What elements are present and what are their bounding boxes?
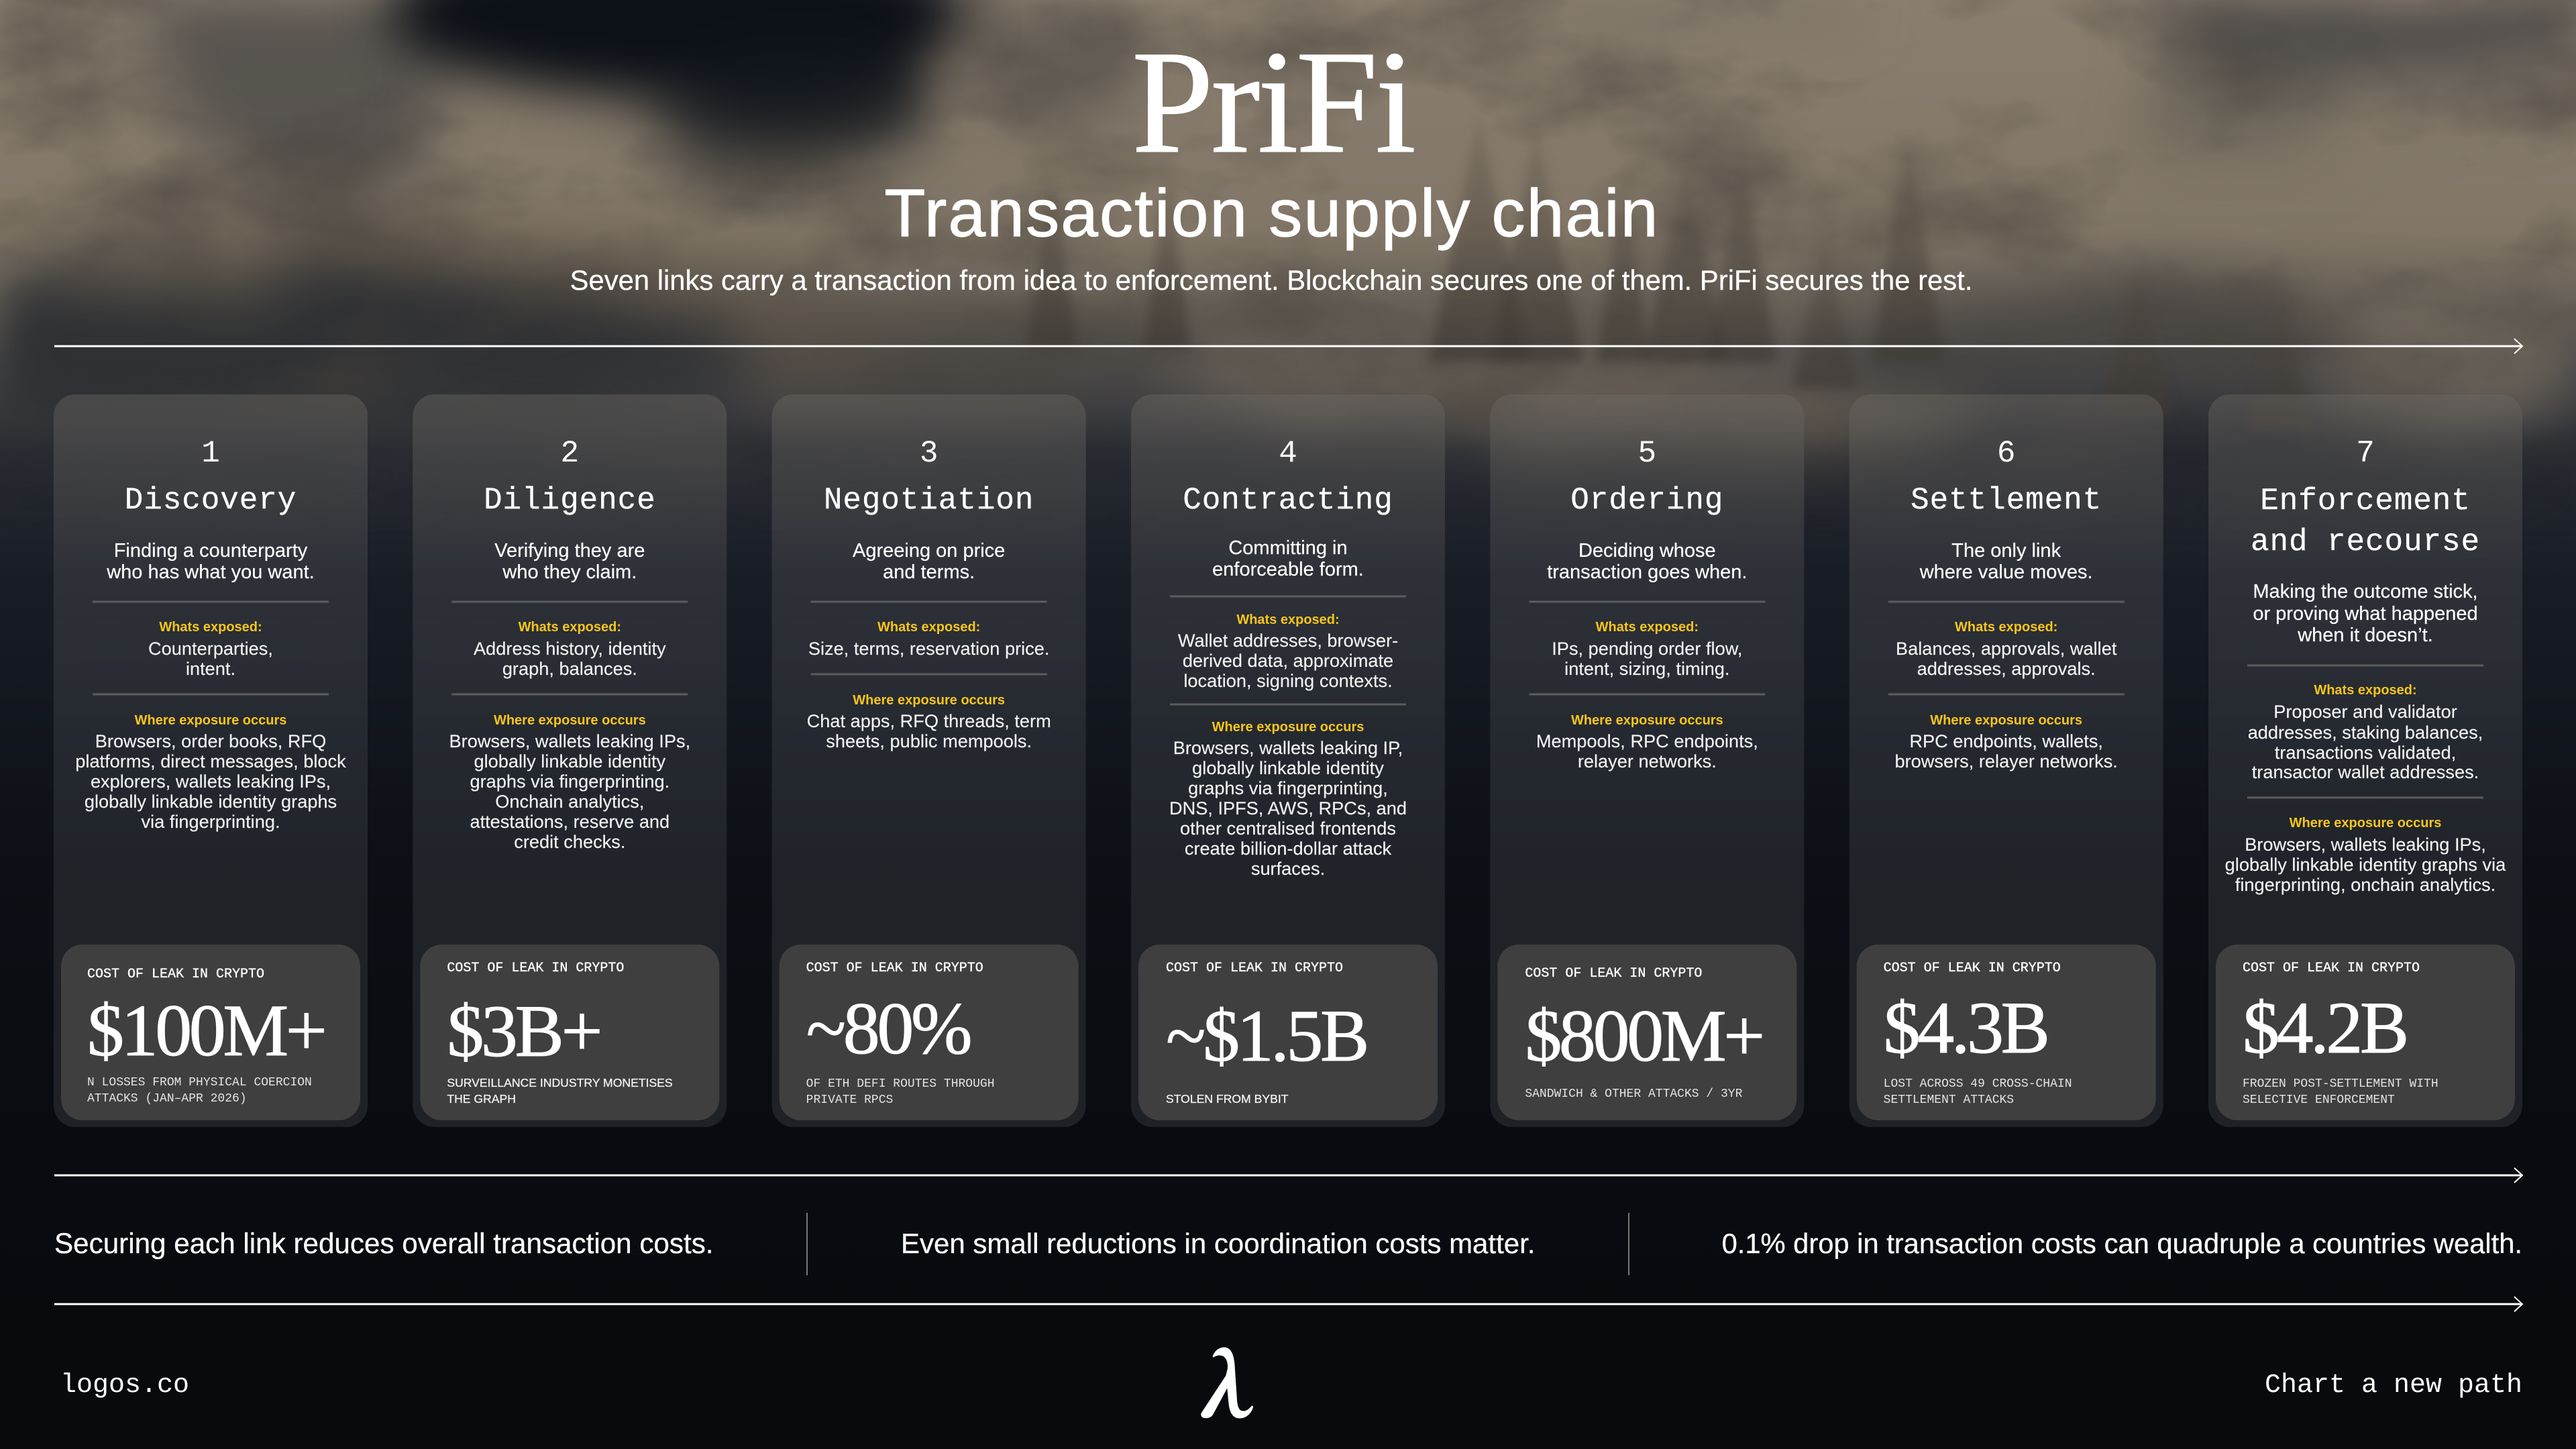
statement 3: 0.1% drop in transaction costs can quadruple a countries wealth.: [1722, 1228, 2522, 1259]
panel: 7 Enforcement and recourse: Where exposure occurs: [2290, 816, 2441, 830]
stat box: ~$1.5B: COST OF LEAK IN CRYPTO: [1166, 961, 1343, 976]
panel: 6 Settlement: 6: [1997, 436, 2015, 471]
panel: 1 Discovery: Browsers, order books, RFQ: [95, 731, 326, 751]
panel: 3 Negotiation: Size, terms, reservation price.: [808, 638, 1049, 659]
panel: 5 Ordering: Where exposure occurs: [1571, 713, 1723, 728]
panel: 7 Enforcement and recourse: 7: [2356, 436, 2375, 471]
panel: 5 Ordering: relayer networks.: [1578, 751, 1717, 771]
stat box: $100M+: ATTACKS (JAN–APR 2026): [87, 1092, 247, 1106]
panel: 7 Enforcement and recourse: Proposer and validator: [2273, 701, 2457, 722]
panel: 1 Discovery: explorers, wallets leaking IPs,: [91, 771, 331, 792]
panel: 2 Diligence: Where exposure occurs: [494, 713, 646, 728]
panel: 4 Contracting: Contracting: [1183, 483, 1393, 518]
panel: 1 Discovery: intent.: [186, 658, 235, 679]
title: PriFi: [1132, 20, 1413, 184]
panel: 7 Enforcement and recourse: fingerprinting, onchain analytics.: [2235, 874, 2496, 895]
arrow: above footer: [54, 1297, 2522, 1311]
panel: 3 Negotiation: and terms.: [883, 561, 975, 583]
panel: 1 Discovery: Counterparties,: [148, 638, 273, 659]
panel: 2 Diligence: Verifying they are: [494, 540, 645, 561]
panel: 2 Diligence: credit checks.: [514, 831, 625, 852]
panel: 5 Ordering: Whats exposed:: [1596, 620, 1699, 635]
panel: 7 Enforcement and recourse: and recourse: [2251, 525, 2480, 559]
arrow: above statements: [54, 1168, 2522, 1183]
panel: 3 Negotiation: Whats exposed:: [877, 620, 980, 635]
stat box: $3B+: SURVEILLANCE INDUSTRY MONETISES: [447, 1076, 673, 1089]
panel: 6 Settlement: The only link: [1951, 540, 2061, 561]
panel: 2 Diligence: [413, 394, 727, 1127]
stat box: ~80%: OF ETH DEFI ROUTES THROUGH: [806, 1077, 995, 1091]
panel: 7 Enforcement and recourse: globally linkable identity graphs via: [2225, 854, 2506, 875]
panel: 1 Discovery: via fingerprinting.: [141, 811, 280, 832]
stat box: $4.3B: [1857, 945, 2156, 1120]
panel: 2 Diligence: Address history, identity: [474, 638, 666, 659]
panel: 2 Diligence: attestations, reserve and: [470, 811, 669, 832]
panel: 6 Settlement: browsers, relayer networks.: [1894, 751, 2118, 771]
panel: 7 Enforcement and recourse: when it doesn’t.: [2297, 625, 2433, 646]
arrow: top chain: [54, 339, 2522, 354]
panel: 6 Settlement: RPC endpoints, wallets,: [1909, 731, 2103, 751]
panel: 1 Discovery: 1: [201, 436, 220, 471]
panel: 4 Contracting: Whats exposed:: [1236, 612, 1340, 627]
panel: 4 Contracting: Committing in: [1228, 537, 1348, 559]
panel: 4 Contracting: globally linkable identity: [1192, 757, 1384, 778]
subtitle heading: Transaction supply chain: [884, 176, 1660, 251]
panel: 1 Discovery: Finding a counterparty: [114, 540, 308, 561]
panel: 4 Contracting: 4: [1279, 436, 1297, 471]
panel: 4 Contracting: Browsers, wallets leaking IP,: [1173, 737, 1403, 758]
stat box: ~80%: ~80%: [806, 987, 970, 1069]
panel: 1 Discovery: [54, 394, 368, 1127]
stat box: $100M+: COST OF LEAK IN CRYPTO: [87, 967, 264, 982]
panel: 6 Settlement: Balances, approvals, wallet: [1896, 638, 2117, 659]
panel: 4 Contracting: Wallet addresses, browser-: [1178, 630, 1398, 651]
panel: 1 Discovery: globally linkable identity graphs: [85, 791, 337, 812]
panel: 7 Enforcement and recourse: transactions validated,: [2275, 742, 2456, 763]
stat box: $800M+: SANDWICH & OTHER ATTACKS / 3YR: [1525, 1087, 1743, 1101]
panel: 5 Ordering: [1490, 394, 1804, 1127]
stat box: ~$1.5B: [1138, 945, 1438, 1120]
stat box: $4.3B: LOST ACROSS 49 CROSS-CHAIN: [1884, 1077, 2072, 1091]
statement 2: Even small reductions in coordination costs matter.: [901, 1228, 1535, 1259]
panel: 2 Diligence: graphs via fingerprinting.: [470, 771, 669, 792]
panel: 2 Diligence: Onchain analytics,: [495, 791, 644, 812]
panel: 7 Enforcement and recourse: addresses, staking balances,: [2248, 722, 2483, 743]
panel: 2 Diligence: Diligence: [484, 483, 656, 518]
panel: 3 Negotiation: Negotiation: [824, 483, 1034, 518]
panel: 7 Enforcement and recourse: Whats exposed:: [2314, 683, 2417, 698]
panel: 6 Settlement: [1849, 394, 2163, 1127]
panel: 6 Settlement: addresses, approvals.: [1917, 658, 2096, 679]
stat box: $4.3B: SETTLEMENT ATTACKS: [1884, 1093, 2014, 1107]
stat box: $100M+: N LOSSES FROM PHYSICAL COERCION: [87, 1076, 312, 1089]
panel: 3 Negotiation: 3: [920, 436, 938, 471]
panel: 5 Ordering: IPs, pending order flow,: [1552, 638, 1742, 659]
panel: 2 Diligence: Browsers, wallets leaking IPs,: [449, 731, 690, 751]
panel: 4 Contracting: enforceable form.: [1212, 559, 1364, 580]
panel: 3 Negotiation: Chat apps, RFQ threads, term: [807, 710, 1051, 731]
panel: 4 Contracting: DNS, IPFS, AWS, RPCs, and: [1169, 798, 1407, 818]
intro sentence: Seven links carry a transaction from idea to enforcement. Blockchain secures one of them. PriFi secures the rest.: [570, 264, 1972, 296]
stat box: $3B+: COST OF LEAK IN CRYPTO: [447, 961, 624, 976]
stat box: ~$1.5B: ~$1.5B: [1166, 995, 1366, 1077]
panel: 3 Negotiation: Where exposure occurs: [853, 693, 1005, 708]
panel: 5 Ordering: 5: [1638, 436, 1656, 471]
statement divider 2: [1628, 1213, 1629, 1275]
panel: 3 Negotiation: [772, 394, 1086, 1127]
panel: 6 Settlement: Where exposure occurs: [1930, 713, 2082, 728]
stat box: $800M+: [1497, 945, 1796, 1120]
icon: lambda logo: [1201, 1347, 1253, 1418]
stat box: $800M+: $800M+: [1525, 995, 1762, 1077]
panel: 7 Enforcement and recourse: or proving what happened: [2253, 603, 2478, 625]
panel: 7 Enforcement and recourse: [2208, 394, 2522, 1127]
statement 1: Securing each link reduces overall transaction costs.: [54, 1228, 714, 1259]
panel: 2 Diligence: globally linkable identity: [474, 751, 666, 771]
panel: 7 Enforcement and recourse: Browsers, wallets leaking IPs,: [2245, 834, 2486, 855]
stat box: $100M+: $100M+: [87, 989, 324, 1071]
panel: 7 Enforcement and recourse: transactor wallet addresses.: [2252, 761, 2479, 782]
panel: 5 Ordering: Mempools, RPC endpoints,: [1536, 731, 1758, 751]
panel: 3 Negotiation: Agreeing on price: [853, 540, 1005, 561]
stat box: ~80%: [780, 945, 1079, 1120]
panel: 1 Discovery: platforms, direct messages, block: [75, 751, 346, 771]
stat box: $3B+: $3B+: [447, 990, 600, 1072]
stat box: ~$1.5B: STOLEN FROM BYBIT: [1166, 1092, 1289, 1106]
stat box: ~80%: PRIVATE RPCS: [806, 1093, 893, 1107]
panel: 5 Ordering: intent, sizing, timing.: [1564, 658, 1729, 679]
stat box: $100M+: [61, 945, 360, 1120]
panel: 1 Discovery: Where exposure occurs: [135, 713, 286, 728]
panel: 3 Negotiation: sheets, public mempools.: [826, 731, 1032, 751]
stat box: $4.3B: $4.3B: [1884, 987, 2047, 1069]
panel: 4 Contracting: location, signing contexts.: [1183, 670, 1393, 691]
stat box: $3B+: [420, 945, 719, 1120]
panel: 2 Diligence: who they claim.: [502, 561, 637, 583]
panel: 1 Discovery: Discovery: [125, 483, 297, 518]
panel: 1 Discovery: Whats exposed:: [159, 620, 262, 635]
panel: 2 Diligence: Whats exposed:: [519, 620, 621, 635]
panel: 4 Contracting: create billion-dollar attack: [1185, 838, 1392, 859]
footer: tagline: Chart a new path: [2265, 1371, 2522, 1401]
panel: 2 Diligence: graph, balances.: [502, 658, 637, 679]
panel: 7 Enforcement and recourse: Enforcement: [2260, 484, 2471, 519]
panel: 6 Settlement: where value moves.: [1919, 561, 2093, 583]
panel: 5 Ordering: Deciding whose: [1578, 540, 1716, 561]
panel: 4 Contracting: graphs via fingerprinting,: [1188, 777, 1388, 798]
panel: 2 Diligence: 2: [561, 436, 579, 471]
panel: 4 Contracting: surfaces.: [1251, 858, 1325, 879]
stat box: ~80%: COST OF LEAK IN CRYPTO: [806, 961, 983, 976]
panel: 4 Contracting: other centralised frontends: [1180, 818, 1396, 839]
stat box: $3B+: THE GRAPH: [447, 1092, 516, 1106]
stat box: $4.2B: [2216, 945, 2515, 1120]
panel: 4 Contracting: Where exposure occurs: [1212, 720, 1364, 735]
statement divider 1: [806, 1213, 808, 1275]
panel: 4 Contracting: [1131, 394, 1445, 1127]
panel: 7 Enforcement and recourse: Making the outcome stick,: [2253, 581, 2478, 602]
panel: 6 Settlement: Settlement: [1911, 483, 2102, 518]
stat box: $800M+: COST OF LEAK IN CRYPTO: [1525, 966, 1702, 981]
stat box: $4.2B: SELECTIVE ENFORCEMENT: [2243, 1093, 2395, 1107]
panel: 4 Contracting: derived data, approximate: [1183, 650, 1393, 671]
footer: site: logos.co: [60, 1371, 189, 1401]
stat box: $4.2B: $4.2B: [2243, 987, 2406, 1069]
panel: 5 Ordering: transaction goes when.: [1547, 561, 1747, 583]
stat box: $4.2B: FROZEN POST-SETTLEMENT WITH: [2243, 1077, 2438, 1091]
panel: 5 Ordering: Ordering: [1570, 483, 1723, 518]
stat box: $4.2B: COST OF LEAK IN CRYPTO: [2243, 961, 2420, 976]
stat box: $4.3B: COST OF LEAK IN CRYPTO: [1884, 961, 2061, 976]
panel: 6 Settlement: Whats exposed:: [1955, 620, 2057, 635]
panel: 1 Discovery: who has what you want.: [106, 561, 315, 583]
